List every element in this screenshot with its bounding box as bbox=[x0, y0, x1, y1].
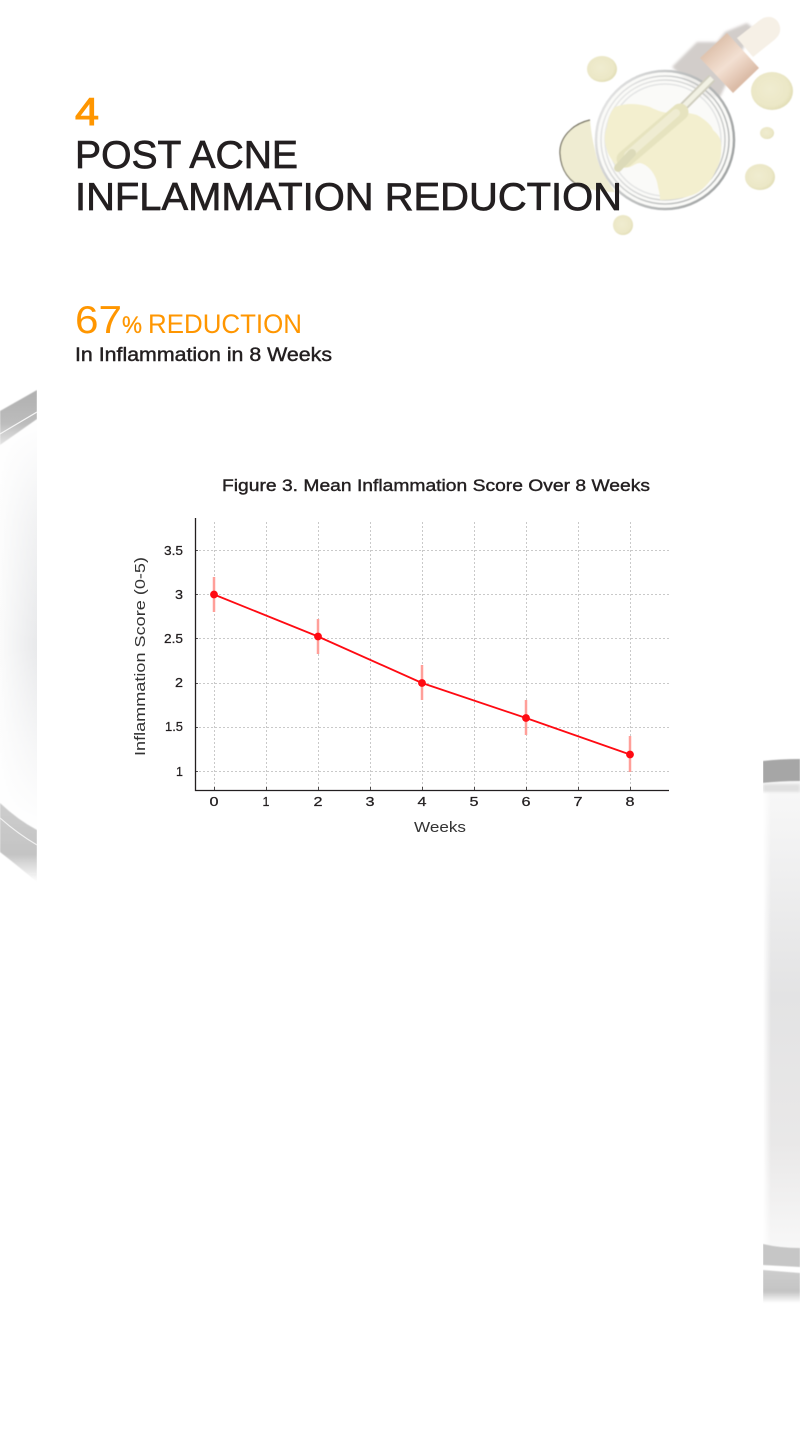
y axis title: Inflammation Score (0-5) bbox=[132, 557, 149, 756]
title bbox=[75, 134, 622, 219]
x tick labels: 5 bbox=[470, 795, 479, 809]
chart title: Figure 3. Mean Inflammation Score Over 8 Weeks bbox=[222, 476, 650, 495]
serum pool bbox=[605, 104, 721, 200]
title: INFLAMMATION REDUCTION bbox=[75, 176, 622, 219]
y tick labels bbox=[164, 544, 183, 779]
image: right dish edge bbox=[763, 759, 800, 1303]
dropper shadow bbox=[672, 23, 753, 98]
y tick labels: 2.5 bbox=[164, 632, 183, 646]
dropper bbox=[618, 17, 780, 168]
number: section 4: 4 bbox=[75, 91, 99, 134]
grid lines bbox=[195, 522, 669, 790]
x tick labels: 6 bbox=[522, 795, 531, 809]
x tick labels: 7 bbox=[574, 795, 583, 809]
image: left dish edge bbox=[0, 390, 37, 882]
drops bbox=[587, 56, 793, 235]
x tick labels: 1 bbox=[263, 795, 270, 809]
subheading: In Inflammation in 8 Weeks bbox=[75, 344, 332, 366]
y tick labels: 1 bbox=[176, 765, 183, 779]
y tick labels: 2 bbox=[175, 676, 183, 690]
x tick labels: 4 bbox=[418, 795, 427, 809]
data line bbox=[214, 594, 630, 754]
serum blob left bbox=[560, 120, 615, 192]
error bars bbox=[214, 577, 630, 772]
x tick labels: 2 bbox=[314, 795, 323, 809]
data points bbox=[210, 591, 634, 758]
x axis title: Weeks bbox=[414, 819, 466, 836]
headline stat bbox=[75, 299, 302, 342]
x tick labels: 0 bbox=[210, 795, 219, 809]
jar bbox=[596, 71, 734, 209]
y tick labels: 3.5 bbox=[164, 544, 183, 558]
headline stat: REDUCTION bbox=[148, 309, 302, 339]
title: POST ACNE bbox=[75, 134, 298, 177]
x tick labels: 8 bbox=[626, 795, 635, 809]
x tick labels: 3 bbox=[366, 795, 375, 809]
x tick labels bbox=[210, 795, 635, 809]
y tick labels: 3 bbox=[175, 588, 183, 602]
headline stat: 67 bbox=[75, 299, 122, 342]
axes bbox=[195, 518, 669, 790]
headline stat: % bbox=[122, 312, 142, 339]
y tick labels: 1.5 bbox=[165, 720, 183, 734]
chart: mean inflammation score bbox=[132, 476, 669, 836]
image: serum jar and dropper bbox=[560, 17, 793, 235]
